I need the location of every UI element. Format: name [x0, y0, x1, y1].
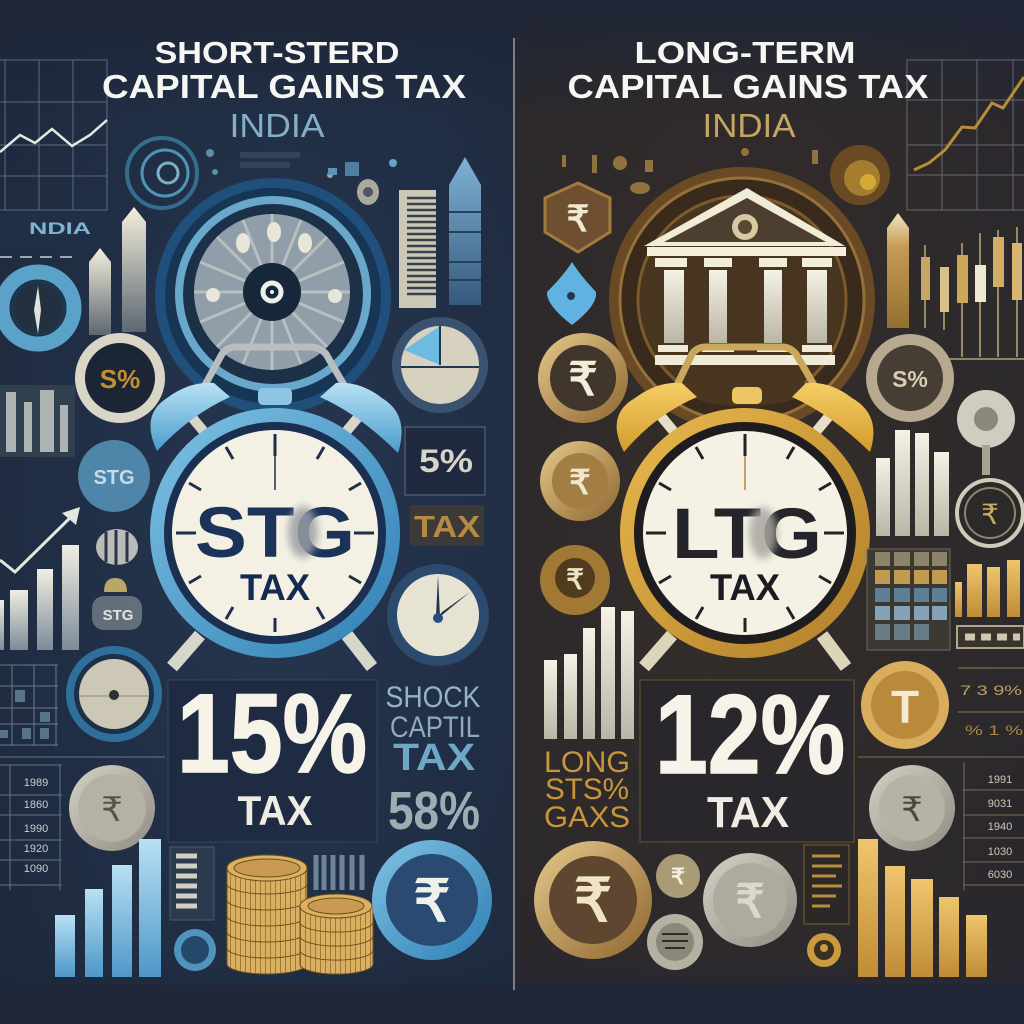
icon: left disc: [66, 646, 162, 742]
table small: 1989: [24, 777, 48, 789]
rising chart left: [0, 507, 80, 650]
small bars right: [955, 560, 1020, 617]
title right: LONG-TERM: [634, 35, 856, 70]
bars right: [876, 430, 949, 536]
table small: 1990: [24, 823, 48, 835]
icon: silver rupee coin: [703, 853, 797, 947]
gold bell right: [792, 383, 873, 452]
text: stock capital tax: CAPTIL: [390, 711, 480, 744]
icon: STG coin small: [75, 333, 165, 423]
panel: 12% tax: 12%: [655, 672, 845, 797]
icon: rupee coin blue: [372, 840, 492, 960]
icon: big rupee coin: [534, 841, 652, 959]
icon: big wheel: [155, 178, 391, 414]
legs: [172, 635, 372, 667]
table right: 1030: [988, 846, 1012, 858]
bells: [150, 383, 230, 451]
stripe tile gold: [804, 845, 849, 924]
gold handle: [677, 347, 814, 385]
top title: CAPITAL GAINS TAX: [102, 68, 466, 105]
gold clock text: LTG: [672, 495, 822, 574]
dashed rule: [0, 256, 80, 258]
icon: gold T coin: T: [891, 681, 919, 733]
coin stacks: [227, 855, 373, 974]
icon: rupee hexagon: [545, 183, 610, 252]
bell right: [320, 383, 402, 453]
panel: 15% tax: TAX: [238, 787, 312, 834]
small icons mid: STG: [103, 607, 133, 624]
small box right: [957, 626, 1024, 648]
alarm clock: TAX: [240, 567, 310, 608]
small icons mid: [92, 529, 142, 630]
white bars left: [544, 607, 634, 739]
panel: 12% tax: [640, 672, 854, 842]
grid small: [0, 665, 58, 746]
icon: coin right: S%: [892, 366, 928, 392]
small stripes: [316, 855, 362, 890]
icon: rupee hexagon: ₹: [567, 198, 589, 239]
table right: 1940: [988, 821, 1012, 833]
ring behind bank: [609, 167, 875, 433]
rupee coins left: ₹: [568, 353, 598, 405]
centre divider: [513, 38, 515, 990]
table small: 1090: [24, 863, 48, 875]
scattered small icons top: [206, 149, 397, 205]
text: long gains: GAXS: [544, 801, 630, 834]
india label: INDIA: [230, 107, 324, 144]
icon: STG blue coin: [78, 440, 150, 512]
panel: 15% tax: [168, 671, 377, 842]
colour table: [867, 549, 950, 650]
table small: 1920: [24, 843, 48, 855]
icon: big rupee coin: ₹: [574, 867, 612, 934]
text: long gains: STS%: [545, 773, 629, 806]
small coin group: ₹: [671, 864, 685, 889]
icon: dark compass: [957, 480, 1023, 546]
icon: bank: [644, 188, 846, 365]
text card: 5%: 5%: [419, 443, 473, 479]
coin two: [540, 441, 620, 521]
right text rows top: % 1 %: [965, 722, 1023, 738]
right text rows top: 7 3 9%: [960, 682, 1022, 698]
coin three: ₹: [566, 564, 584, 595]
panel: 12% tax: TAX: [707, 788, 789, 837]
left grid chart: [0, 60, 107, 210]
text card: TAX: TAX: [414, 509, 480, 544]
gold pins: [660, 415, 830, 445]
right text rows top: [958, 668, 1024, 738]
rupee coins left: [538, 333, 628, 423]
top title: SHORT-STERD: [154, 35, 400, 70]
bank bowl: [683, 370, 807, 406]
gold legs: [644, 635, 846, 667]
text: stock capital tax: SHOCK: [386, 681, 480, 714]
table right: 9031: [988, 798, 1012, 810]
alarm clock gold: [617, 347, 873, 667]
icon: gold T coin: [861, 661, 949, 749]
coin two: ₹: [569, 464, 591, 502]
icon: pie clock right: [392, 317, 488, 413]
text card: 5%: [405, 427, 485, 495]
icon: rupee coin blue: ₹: [414, 869, 450, 934]
alarm clock gold: TAX: [710, 567, 780, 608]
icon: silver rupee coin: ₹: [735, 875, 765, 927]
text: long gains: LONG: [544, 746, 630, 779]
title right: CAPITAL GAINS TAX: [568, 68, 928, 105]
icon: small clock right: [387, 564, 489, 666]
icon: STG coin small: S%: [100, 364, 140, 394]
icon: dark compass: ₹: [981, 499, 999, 530]
icon: silver coin right: [869, 765, 955, 851]
small disc: [174, 929, 216, 971]
bar block left: [0, 385, 75, 457]
clock handle: [205, 347, 344, 385]
top small icons right: [562, 148, 818, 194]
icon: STG blue coin: STG: [93, 467, 135, 489]
table small: [0, 757, 165, 890]
text: 58%: 58%: [388, 781, 480, 841]
gold bells: [617, 383, 697, 452]
icon: small circle top: [127, 138, 197, 208]
icon: blue diamond: [547, 262, 596, 325]
top title: [102, 35, 466, 105]
text: long gains: [544, 746, 630, 834]
icon: gold ring top: [830, 145, 890, 205]
coin three: [540, 545, 610, 615]
table right: 6030: [988, 869, 1012, 881]
pin icon: [957, 390, 1015, 475]
icon: left blue ring: [2, 272, 74, 344]
arrow bar right: [449, 157, 481, 305]
clock text: STG: [195, 494, 355, 573]
title right: [568, 35, 928, 105]
text: stock capital tax: [386, 681, 480, 779]
small coin group: [647, 854, 703, 970]
text: stock capital tax: TAX: [393, 737, 476, 779]
striped tile: [170, 847, 214, 920]
panel: long-term: [515, 0, 1024, 1024]
candlestick chart: [887, 213, 1024, 359]
table small: 1860: [24, 799, 48, 811]
blue bar chart: [55, 839, 161, 977]
clock pins: [190, 415, 360, 445]
chart top right: [907, 60, 1024, 210]
left up arrows bars: [89, 207, 146, 335]
gold bar chart: [858, 839, 987, 977]
alarm clock: [150, 347, 402, 667]
icon: silver coin: ₹: [101, 791, 123, 829]
panel: short-term: [0, 0, 512, 1024]
india label right: INDIA: [702, 107, 796, 144]
right striped bar: [399, 190, 436, 308]
text card: TAX: [410, 505, 484, 546]
small lock: [807, 933, 841, 967]
icon: silver coin: [69, 765, 155, 851]
panel: 15% tax: 15%: [177, 671, 367, 796]
icon: silver coin right: ₹: [901, 791, 923, 829]
table right: 1991: [988, 774, 1012, 786]
icon: coin right: [866, 334, 954, 422]
india tag: NDIA: [29, 219, 91, 238]
table right: [858, 757, 1024, 890]
india tag: [0, 212, 105, 248]
